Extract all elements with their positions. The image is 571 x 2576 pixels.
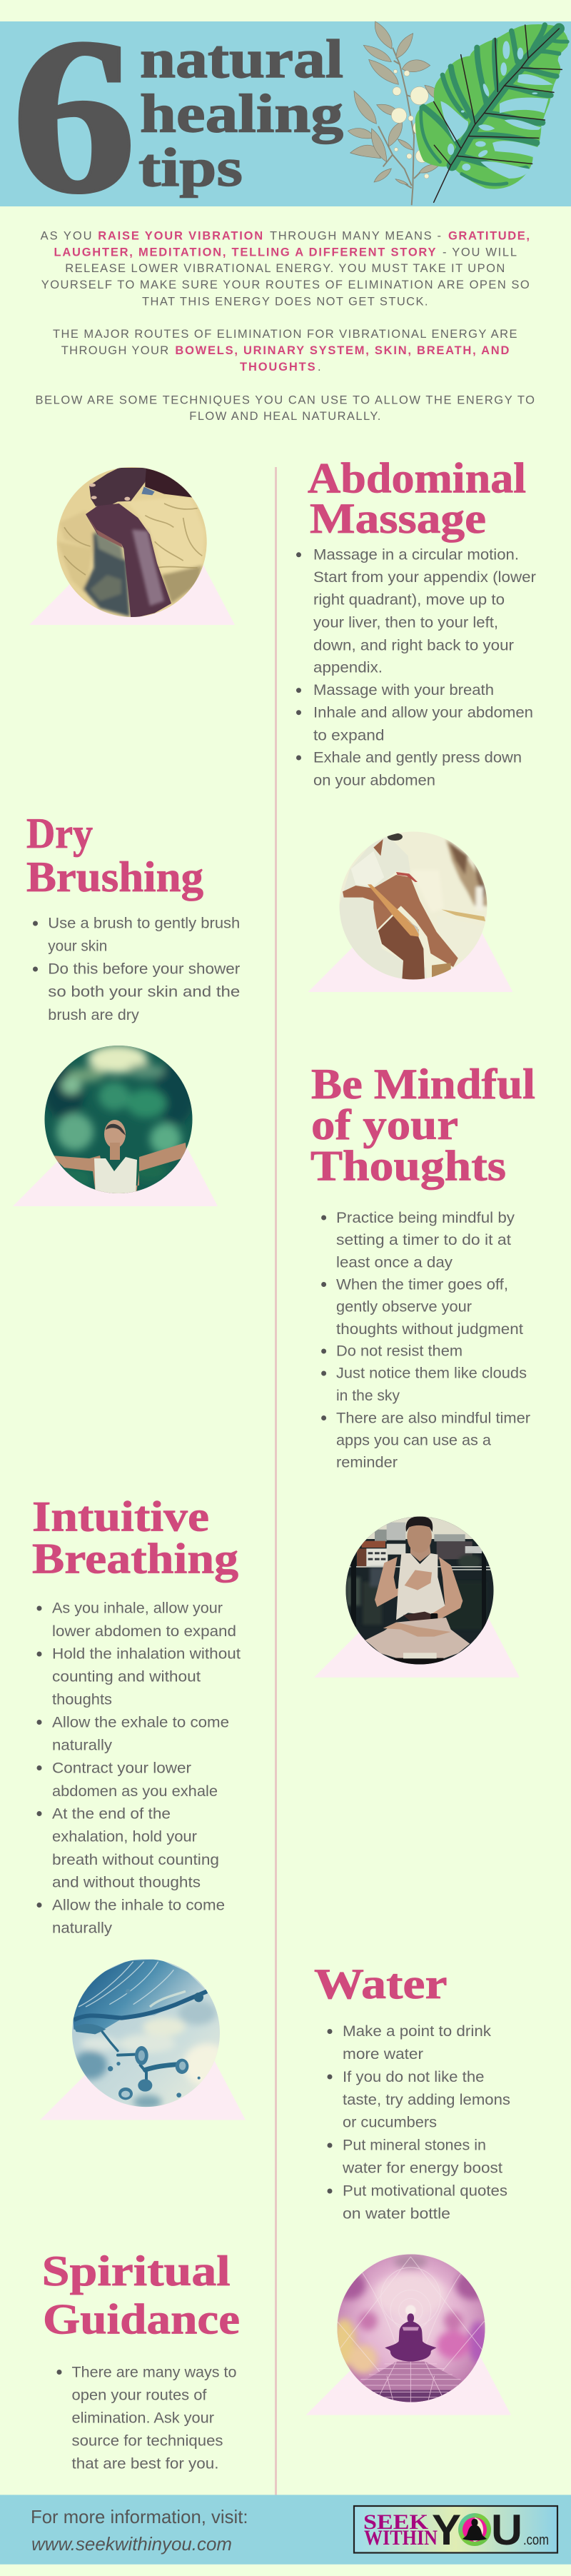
panel: dry brushing text xyxy=(26,810,240,1023)
heading: Abdominal xyxy=(308,454,526,501)
bullet list: Use a brush to gently brush xyxy=(48,916,240,932)
bullet list: reminder xyxy=(336,1454,398,1470)
heading xyxy=(42,2247,240,2343)
intro paragraph 1: THROUGH MANY MEANS - xyxy=(270,230,441,243)
heading: of your xyxy=(311,1101,458,1148)
intro paragraph 2: . xyxy=(318,361,321,374)
icon: monstera leaf xyxy=(415,24,568,202)
bullet list: to expand xyxy=(313,727,384,743)
footer band xyxy=(0,2495,571,2565)
intro paragraph 2 xyxy=(53,328,517,374)
bullet list: breath without counting xyxy=(52,1852,219,1868)
bullet list: counting and without xyxy=(52,1669,201,1685)
intro paragraph 1: GRATITUDE, xyxy=(448,230,530,243)
panel: intuitive breathing text xyxy=(32,1493,241,1936)
intro paragraph 1: RELEASE LOWER VIBRATIONAL ENERGY. YOU MUST TAKE IT UPON xyxy=(65,262,505,275)
heading: Guidance xyxy=(43,2296,240,2343)
bullet list: Hold the inhalation without xyxy=(52,1645,241,1663)
center divider xyxy=(275,467,277,2495)
panel: spiritual guidance photo xyxy=(306,2250,511,2415)
logo: seek within you: SEEK xyxy=(363,2510,429,2534)
heading: Breathing xyxy=(32,1535,238,1583)
intro paragraph 1: RAISE YOUR VIBRATION xyxy=(98,230,263,243)
panel: water text xyxy=(314,1960,510,2222)
bullet list: Contract your lower xyxy=(52,1760,191,1776)
bullet list: that are best for you. xyxy=(71,2455,218,2472)
bullet list xyxy=(296,546,536,789)
intro paragraph 1: AS YOU xyxy=(41,230,92,243)
intro paragraph 1: YOURSELF TO MAKE SURE YOUR ROUTES OF ELIMINATION ARE OPEN SO xyxy=(41,279,530,291)
bullet list: apps you can use as a xyxy=(336,1433,491,1449)
bullet list: exhalation, hold your xyxy=(52,1829,197,1845)
intro paragraph 1: - YOU WILL xyxy=(443,246,517,259)
footer text xyxy=(31,2506,248,2555)
intro paragraph 2: THOUGHTS xyxy=(240,361,315,374)
heading: Intuitive xyxy=(32,1493,209,1540)
heading: Brushing xyxy=(26,853,203,901)
bullet list: gently observe your xyxy=(336,1299,472,1315)
bullet list: Do this before your shower xyxy=(48,961,240,977)
footer text: For more information, visit: xyxy=(31,2506,248,2527)
heading: Dry xyxy=(26,810,93,857)
heading: Water xyxy=(314,1960,447,2008)
title numeral 6: 6 xyxy=(11,0,136,239)
bullet list: source for techniques xyxy=(71,2432,223,2449)
bullet list: or cucumbers xyxy=(343,2115,437,2131)
heading: Thoughts xyxy=(310,1143,506,1190)
bullet list xyxy=(321,1210,530,1470)
bullet list: Put mineral stones in xyxy=(343,2138,486,2154)
title: natural healing tips: tips xyxy=(138,138,243,198)
title: natural healing tips: healing xyxy=(140,84,343,144)
bullet list: elimination. Ask your xyxy=(71,2410,214,2426)
heading xyxy=(308,454,526,542)
heading: Massage xyxy=(310,495,486,542)
bullet list: in the sky xyxy=(336,1388,400,1404)
bullet list: Allow the exhale to come xyxy=(52,1714,229,1731)
bullet list: and without thoughts xyxy=(52,1874,201,1891)
heading: Be Mindful xyxy=(311,1061,535,1108)
bullet list: Massage in a circular motion. xyxy=(313,546,519,563)
panel: abdominal massage photo xyxy=(29,461,235,625)
intro paragraph 1: LAUGHTER, MEDITATION, TELLING A DIFFERENT STORY xyxy=(54,246,435,259)
header banner xyxy=(0,0,571,239)
bullet list: Inhale and allow your abdomen xyxy=(313,704,533,721)
bullet list: There are many ways to xyxy=(71,2364,237,2380)
footer text: www.seekwithinyou.com xyxy=(31,2533,232,2555)
intro paragraph 2: THROUGH YOUR xyxy=(61,344,168,357)
bullet list xyxy=(57,2364,237,2472)
bullet list: There are also mindful timer xyxy=(336,1410,530,1426)
bullet list: As you inhale, allow your xyxy=(52,1600,223,1617)
bullet list: taste, try adding lemons xyxy=(343,2092,510,2108)
panel: intuitive breathing photo xyxy=(314,1510,520,1678)
panel: be mindful text xyxy=(310,1061,535,1470)
bullet list: down, and right back to your xyxy=(313,637,514,653)
bullet list: naturally xyxy=(52,1738,113,1754)
logo: seek within you xyxy=(354,2506,557,2554)
title: natural healing tips: natural xyxy=(140,29,343,89)
bullet list: water for energy boost xyxy=(342,2160,502,2177)
intro paragraph 2: BOWELS, URINARY SYSTEM, SKIN, BREATH, AND xyxy=(175,344,509,357)
bullet list: thoughts without judgment xyxy=(336,1321,523,1338)
bullet list xyxy=(37,1600,241,1936)
panel: dry brushing photo xyxy=(308,825,512,992)
bullet list xyxy=(327,2023,510,2222)
bullet list: Practice being mindful by xyxy=(336,1210,515,1226)
bullet list: abdomen as you exhale xyxy=(52,1783,218,1800)
heading xyxy=(32,1493,238,1583)
bullet list: lower abdomen to expand xyxy=(52,1623,236,1640)
bullet list: your skin xyxy=(48,938,107,954)
bullet list: At the end of the xyxy=(52,1806,171,1823)
logo: seek within you: U xyxy=(491,2506,522,2554)
bullet list: so both your skin and the xyxy=(48,984,240,1001)
bullet list: Exhale and gently press down xyxy=(313,750,522,766)
heading: Spiritual xyxy=(42,2247,231,2295)
bullet list: Put motivational quotes xyxy=(343,2183,507,2200)
bullet list: least once a day xyxy=(336,1254,453,1271)
intro paragraph 3: FLOW AND HEAL NATURALLY. xyxy=(189,410,380,423)
title: natural healing tips xyxy=(138,29,343,198)
bullet list: Make a point to drink xyxy=(343,2023,492,2040)
bullet list: on water bottle xyxy=(343,2206,450,2222)
bullet list xyxy=(33,916,240,1023)
intro paragraph 1 xyxy=(41,230,530,308)
heading xyxy=(310,1061,535,1190)
icon: botanical sprig xyxy=(348,21,445,205)
bullet list: your liver, then to your left, xyxy=(313,614,498,631)
logo: seek within you: Y xyxy=(432,2506,461,2554)
panel: be mindful photo xyxy=(13,1043,218,1206)
bullet list: thoughts xyxy=(52,1691,112,1708)
bullet list: open your routes of xyxy=(71,2387,207,2403)
bullet list: When the timer goes off, xyxy=(336,1277,508,1293)
panel: abdominal massage text xyxy=(296,454,536,789)
intro paragraph 1: THAT THIS ENERGY DOES NOT GET STUCK. xyxy=(142,295,428,308)
bullet list: setting a timer to do it at xyxy=(336,1232,511,1248)
bullet list: Do not resist them xyxy=(336,1343,463,1360)
bullet list: right quadrant), move up to xyxy=(313,592,505,608)
bullet list: Start from your appendix (lower xyxy=(313,569,536,586)
bullet list: brush are dry xyxy=(48,1007,139,1023)
panel: spiritual guidance text xyxy=(42,2247,240,2472)
bullet list: naturally xyxy=(52,1920,113,1936)
logo: seek within you: WITHIN xyxy=(364,2526,438,2550)
bullet list: Just notice them like clouds xyxy=(336,1365,527,1381)
bullet list: Massage with your breath xyxy=(313,682,494,698)
panel: water photo xyxy=(40,1953,246,2120)
bullet list: If you do not like the xyxy=(343,2069,484,2085)
intro paragraph 3 xyxy=(36,394,535,423)
bullet list: appendix. xyxy=(313,660,383,676)
logo: seek within you: .com xyxy=(523,2532,549,2548)
intro paragraph 2: THE MAJOR ROUTES OF ELIMINATION FOR VIBRATIONAL ENERGY ARE xyxy=(53,328,517,341)
bullet list: on your abdomen xyxy=(313,773,435,789)
bullet list: Allow the inhale to come xyxy=(52,1898,225,1914)
bullet list: more water xyxy=(343,2046,423,2063)
heading xyxy=(26,810,203,901)
intro paragraph 3: BELOW ARE SOME TECHNIQUES YOU CAN USE TO ALLOW THE ENERGY TO xyxy=(36,394,535,406)
